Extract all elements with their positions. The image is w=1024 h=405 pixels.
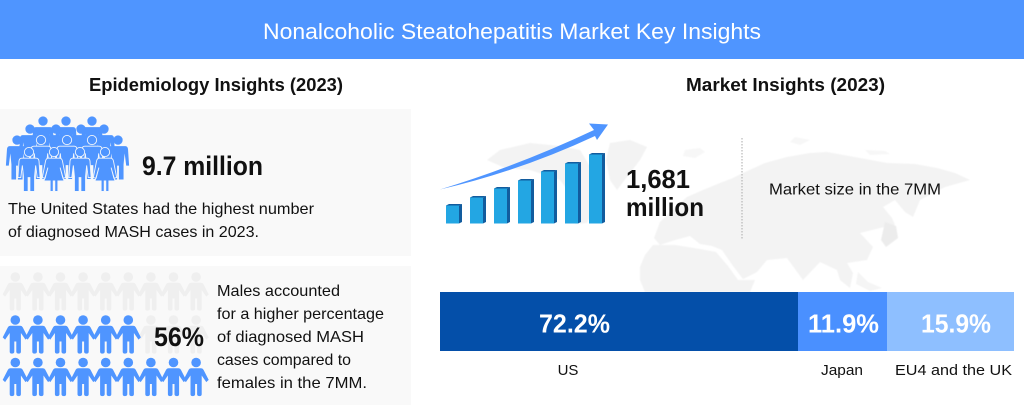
bar labels xyxy=(558,362,1012,379)
heading: epidemiology: Epidemiology Insights (2023) xyxy=(89,75,343,95)
stat: market size value: million xyxy=(626,192,704,222)
bar chart with growth arrow xyxy=(440,124,608,224)
segment: US: 72.2% xyxy=(539,308,610,338)
background world map xyxy=(487,137,970,292)
segment: US xyxy=(440,292,798,351)
bar labels: EU4 and the UK xyxy=(895,362,1012,379)
header banner xyxy=(0,0,1024,59)
stat: 9.7 million: 9.7 million xyxy=(142,151,263,181)
segment: Japan xyxy=(798,292,887,351)
stat: market size value xyxy=(626,164,704,222)
title: Nonalcoholic Steatohepatitis Market Key Insights xyxy=(263,19,761,44)
text: males accounted: of diagnosed MASH xyxy=(217,329,364,346)
segment: Japan: 11.9% xyxy=(808,308,879,338)
text: highest number of cases xyxy=(8,201,315,241)
heading: market: Market Insights (2023) xyxy=(686,75,885,95)
bar labels: US xyxy=(558,362,578,379)
icon: crowd of people xyxy=(6,116,129,191)
text: highest number of cases: of diagnosed MASH cases in 2023. xyxy=(8,224,259,241)
text: market size label: Market size in the 7MM xyxy=(769,182,941,198)
bar labels: Japan xyxy=(821,362,863,379)
stat: market size value: 1,681 xyxy=(626,164,690,194)
arrow xyxy=(440,124,608,190)
segment: EU4 and the UK xyxy=(887,292,1014,351)
segmented share bar xyxy=(440,292,1014,351)
text: males accounted xyxy=(217,283,384,392)
text: males accounted: for a higher percentage xyxy=(217,306,384,323)
panel: male share xyxy=(0,266,411,405)
panel: diagnosed cases xyxy=(0,109,411,256)
text: highest number of cases: The United States had the highest number xyxy=(8,201,315,218)
segment: EU4 and the UK: 15.9% xyxy=(921,308,991,338)
text: males accounted: females in the 7MM. xyxy=(217,375,367,392)
icon: people rows xyxy=(3,272,209,396)
text: males accounted: cases compared to xyxy=(217,352,351,369)
stat: 56%: 56% xyxy=(154,322,204,352)
text: males accounted: Males accounted xyxy=(217,283,340,300)
bars xyxy=(446,153,605,224)
